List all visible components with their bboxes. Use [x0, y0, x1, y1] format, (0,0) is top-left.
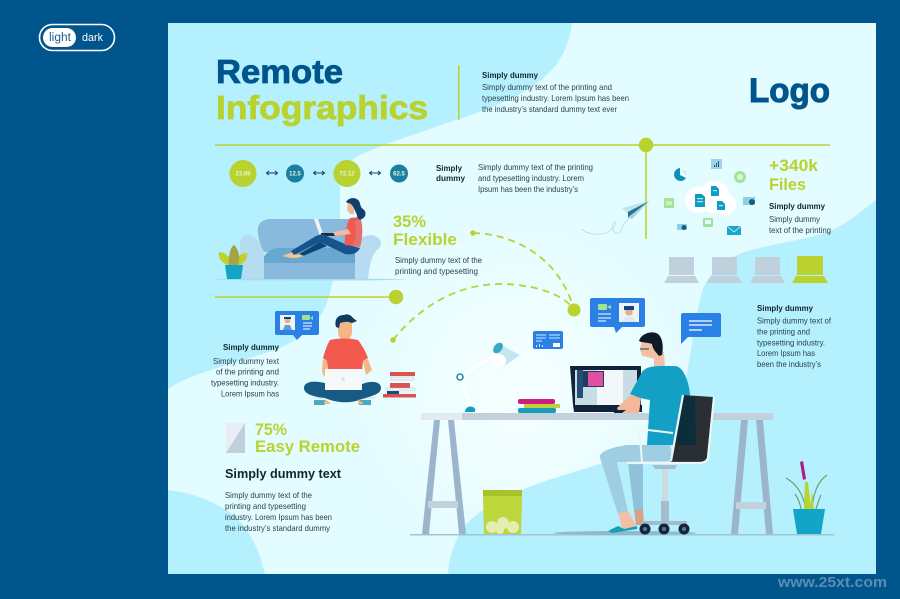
right text block: typesetting industry. — [757, 338, 825, 348]
number sequence: 72.12 — [339, 172, 355, 178]
text: left simply dummy: typesetting industry. — [211, 378, 279, 388]
stat: 75% easy remote: 75% — [255, 421, 287, 439]
number sequence: 62.5 — [393, 172, 405, 178]
office chair — [627, 395, 714, 534]
blue info card — [533, 331, 563, 349]
desk books — [518, 399, 560, 413]
files cloud icons — [664, 159, 755, 235]
laptop row — [664, 256, 828, 283]
text: simply dummy row: Simply dummy text of the printing — [478, 163, 593, 172]
text: left simply dummy — [211, 342, 280, 398]
stat: 35% flexible: 35% — [393, 213, 426, 231]
dashed connector arrows — [390, 230, 580, 343]
stat: +340k files: Files — [769, 176, 806, 194]
stat: 35% flexible — [393, 213, 482, 276]
text: left simply dummy: Simply dummy text — [213, 357, 280, 366]
right text block: the printing and — [757, 328, 810, 336]
text: simply dummy row: Simply — [436, 163, 462, 173]
right text block: Lorem Ipsum has — [757, 349, 815, 358]
right text block: Simply dummy — [757, 303, 813, 313]
plant left — [219, 245, 247, 279]
right text block: been the industry’s — [757, 360, 821, 369]
text: simply dummy text: Simply dummy text — [225, 467, 342, 481]
light dark toggle — [40, 24, 114, 50]
right text block: Simply dummy text of — [757, 316, 832, 326]
man sitting with laptop — [304, 314, 381, 405]
text: simply dummy text — [225, 467, 342, 533]
watermark: www.25xt.com — [777, 574, 887, 591]
text: simply dummy text: printing and typesetting — [225, 502, 306, 511]
floor line — [410, 531, 834, 536]
stat: +340k files: text of the printing — [769, 226, 831, 235]
man at desk — [600, 332, 690, 533]
text: simply dummy text: industry. Lorem Ipsum has been — [225, 513, 332, 522]
stat: +340k files: +340k — [769, 157, 819, 175]
stat: 75% easy remote — [226, 421, 360, 456]
number sequence: 12.5 — [289, 172, 301, 178]
text: left simply dummy: of the printing and — [216, 368, 279, 376]
stat: 35% flexible: printing and typesetting — [395, 267, 478, 276]
trash bin — [483, 490, 522, 534]
chat bubble text — [681, 313, 721, 344]
plant right — [786, 461, 827, 534]
intro text block: the industry’s standard dummy text ever — [482, 105, 617, 114]
text: simply dummy row — [436, 163, 593, 194]
timeline connector — [215, 138, 830, 239]
stat: 35% flexible: Simply dummy text of the — [395, 256, 482, 265]
text: simply dummy text: Simply dummy text of the — [225, 491, 312, 500]
intro text block: typesetting industry. Lorem Ipsum has been — [482, 94, 629, 103]
laptop on desk — [570, 366, 642, 412]
title: Infographics — [216, 89, 428, 126]
text: simply dummy row: dummy — [436, 173, 465, 183]
desk — [421, 413, 773, 534]
stat: 75% easy remote: Easy Remote — [255, 438, 360, 456]
text: left simply dummy: Lorem Ipsum has — [221, 390, 279, 398]
text: simply dummy text: the industry’s standard dummy — [225, 524, 331, 533]
light dark toggle: dark — [82, 32, 103, 44]
right text block — [757, 303, 832, 369]
text: simply dummy row: Ipsum has been the industry’s — [478, 185, 578, 194]
title: Remote — [216, 53, 343, 90]
stat: 35% flexible: Flexible — [393, 231, 457, 249]
stat: +340k files — [769, 157, 831, 235]
number sequence — [230, 160, 408, 187]
intro text block: Simply dummy — [482, 70, 538, 80]
logo: Logo — [749, 72, 830, 110]
light dark toggle: light — [49, 32, 72, 44]
infographic panel background — [168, 23, 876, 574]
desk lamp — [457, 341, 520, 413]
number sequence: 23.89 — [235, 172, 251, 178]
chat bubble left — [275, 311, 319, 340]
text: simply dummy row: and typesetting industry. Lorem — [478, 174, 584, 183]
chat bubble video — [590, 298, 645, 333]
title — [216, 53, 428, 126]
intro text block — [458, 65, 629, 120]
intro text block: Simply dummy text of the printing and — [482, 83, 612, 92]
stat: +340k files: Simply dummy — [769, 201, 825, 211]
text: left simply dummy: Simply dummy — [223, 342, 279, 352]
book stack — [383, 372, 416, 398]
paper plane — [581, 201, 649, 234]
woman on sofa — [215, 198, 405, 280]
section line — [215, 290, 403, 304]
stat: +340k files: Simply dummy — [769, 215, 821, 224]
